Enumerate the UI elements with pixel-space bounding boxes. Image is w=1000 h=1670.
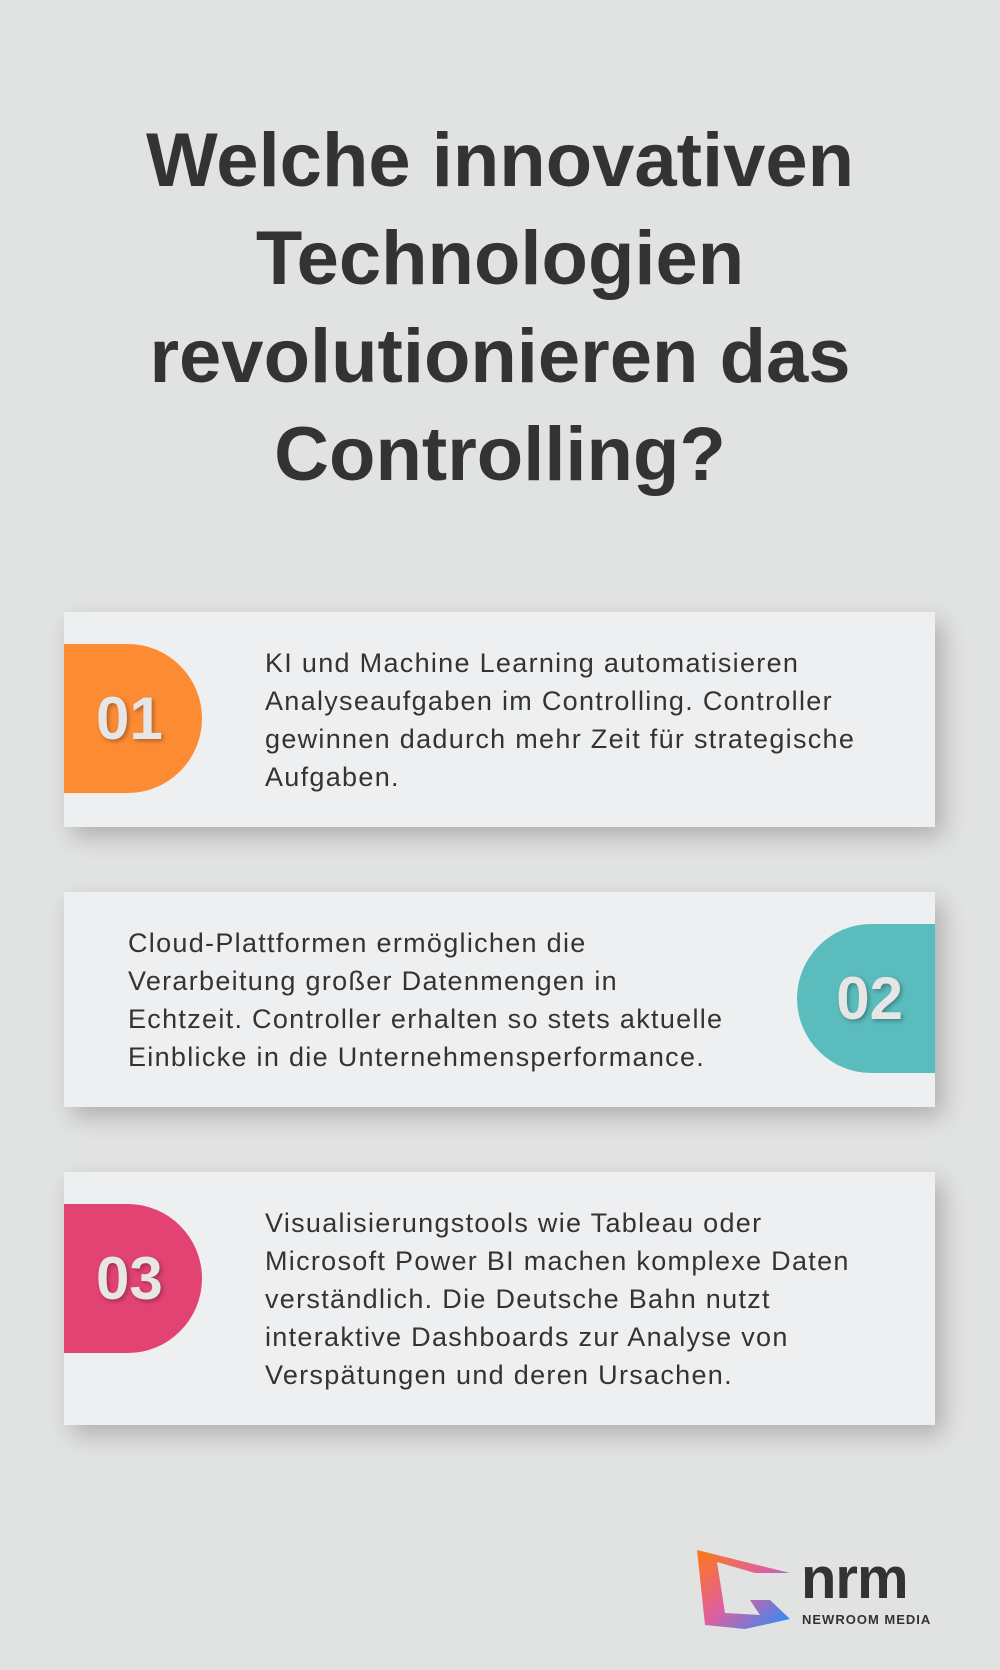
text 3: verständlich. Die Deutsche Bahn nutzt xyxy=(265,1284,771,1314)
title xyxy=(146,118,854,497)
logo: NEWROOM MEDIA xyxy=(802,1612,931,1627)
text 1: gewinnen dadurch mehr Zeit für strategische xyxy=(265,724,855,754)
badge 02 xyxy=(797,924,935,1073)
text 3: Visualisierungstools wie Tableau oder xyxy=(265,1208,762,1238)
badge 03 xyxy=(64,1204,202,1353)
title: Technologien xyxy=(256,216,744,301)
text 2: Verarbeitung großer Datenmengen in xyxy=(128,966,618,996)
title: revolutionieren das xyxy=(149,314,851,399)
title: Controlling? xyxy=(274,412,726,497)
text 1: KI und Machine Learning automatisieren xyxy=(265,648,799,678)
text 3 xyxy=(265,1208,850,1390)
logo text: nrm xyxy=(801,1546,908,1611)
icon: logo mark xyxy=(697,1550,790,1629)
panel: card 1 xyxy=(64,612,935,827)
title: Welche innovativen xyxy=(146,118,854,203)
text 2: Cloud-Plattformen ermöglichen die xyxy=(128,928,587,958)
badge 01 xyxy=(64,644,202,793)
text 1 xyxy=(265,648,855,792)
text 1: Aufgaben. xyxy=(265,762,400,792)
logo xyxy=(697,1546,931,1629)
panel: card 2 xyxy=(64,892,935,1107)
text 3: interaktive Dashboards zur Analyse von xyxy=(265,1322,789,1352)
badge 02: 02 xyxy=(836,965,903,1032)
text 3: Verspätungen und deren Ursachen. xyxy=(265,1360,733,1390)
text 3: Microsoft Power BI machen komplexe Daten xyxy=(265,1246,850,1276)
text 2: Einblicke in die Unternehmensperformance. xyxy=(128,1042,705,1072)
text 2 xyxy=(128,928,723,1072)
badge 01: 01 xyxy=(96,685,163,752)
text 2: Echtzeit. Controller erhalten so stets aktuelle xyxy=(128,1004,723,1034)
panel: card 3 xyxy=(64,1172,935,1425)
text 1: Analyseaufgaben im Controlling. Controller xyxy=(265,686,833,716)
badge 03: 03 xyxy=(96,1245,163,1312)
